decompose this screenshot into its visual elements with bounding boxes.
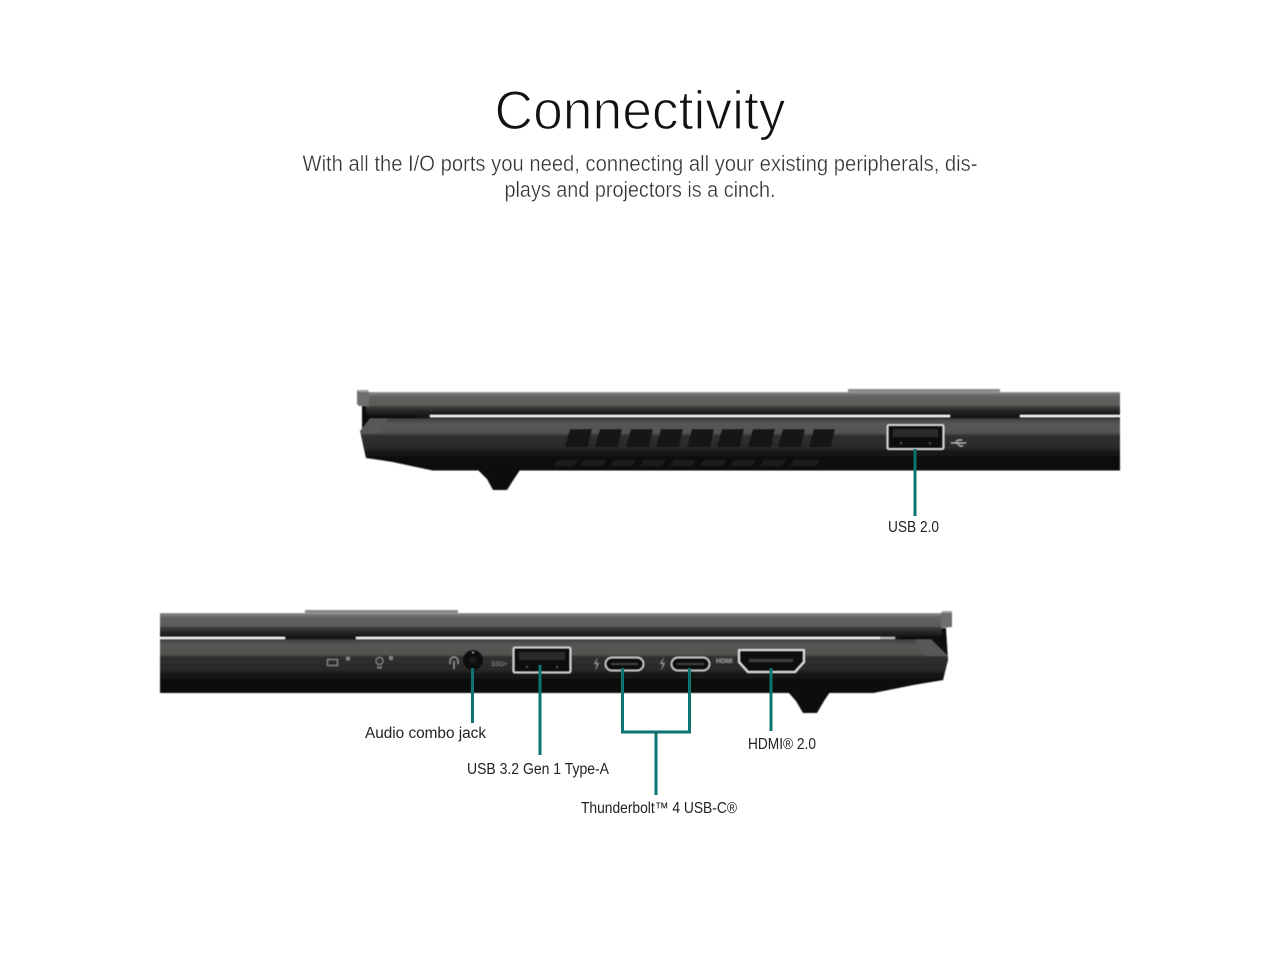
label: USB 2.0: USB 2.0	[888, 519, 939, 536]
foot	[478, 470, 520, 490]
icon: USB symbol	[951, 440, 966, 446]
USB-C port 2	[672, 658, 710, 670]
label: USB 3.2: USB 3.2 Gen 1 Type-A	[467, 761, 610, 778]
laptop: right side view	[160, 610, 952, 713]
base	[160, 640, 948, 693]
hinge cap	[357, 390, 369, 406]
USB-C port 1	[606, 658, 644, 670]
callout line: HDMI	[770, 668, 772, 731]
callout line: audio	[471, 668, 474, 723]
audio jack	[463, 650, 483, 670]
label: Thunderbolt: Thunderbolt™ 4 USB-C®	[581, 800, 738, 817]
icon: battery LED	[328, 657, 350, 666]
icon: HDMI label: HDMI	[716, 658, 733, 665]
title: Connectivity	[494, 79, 786, 141]
USB 3.2 port	[514, 648, 570, 672]
HDMI port	[739, 650, 804, 672]
slit	[160, 636, 900, 639]
icon: thunderbolt 1	[594, 657, 599, 671]
callout line: USB 3.2	[538, 665, 542, 755]
lid	[366, 392, 1120, 415]
foot	[788, 692, 830, 713]
lid	[160, 613, 942, 636]
base	[360, 418, 1120, 470]
subtitle text: plays and projectors is a cinch.	[504, 177, 776, 202]
icon: SS label: SSG+	[491, 662, 508, 668]
slit	[414, 415, 1120, 418]
icon: power LED	[376, 656, 392, 668]
label: HDMI: HDMI® 2.0	[748, 736, 816, 753]
USB 2.0 port	[888, 425, 944, 449]
subtitle text: With all the I/O ports you need, connecting all your existing peripherals, dis-	[302, 151, 978, 176]
callout line: USB 2.0	[914, 449, 916, 516]
label: audio combo jack: Audio combo jack	[365, 725, 486, 742]
vents	[565, 429, 835, 447]
laptop: left side view	[357, 389, 1120, 490]
icon: thunderbolt 2	[660, 657, 665, 671]
callout bracket: Thunderbolt	[622, 668, 690, 795]
subtitle text	[302, 151, 978, 202]
icon: headset	[450, 657, 458, 669]
hinge cap	[941, 611, 952, 628]
